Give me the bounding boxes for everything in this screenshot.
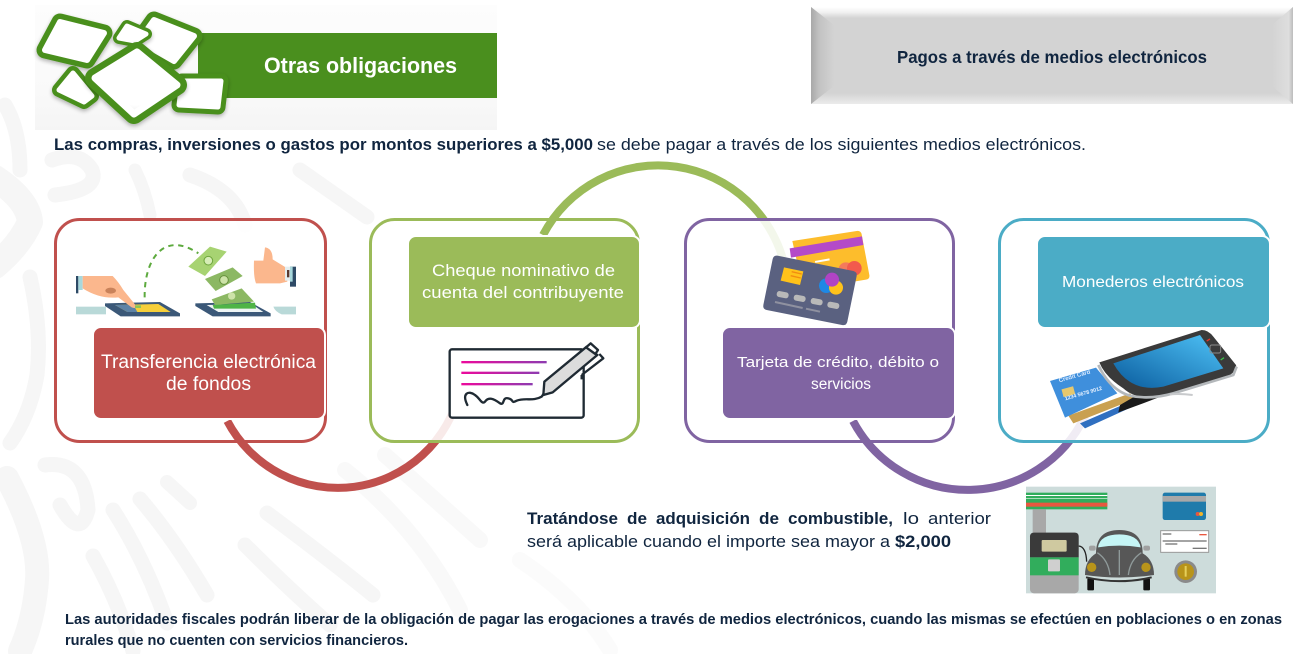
combustible note: lo [903,510,919,528]
combustible note: Tratándose [527,510,618,528]
combustible note: anterior [928,510,992,528]
icon: phone wallet with cards: 1234 5678 9012 [1064,386,1103,402]
red card outline [56,220,326,442]
icon: money transfer between tablets [76,245,296,316]
purple connector arc [853,416,1085,490]
intro sentence: Las compras, inversiones o gastos por montos superiores a $5,000 [54,135,593,154]
combustible note: adquisición [656,510,750,528]
green label [408,236,640,328]
icon: credit cards [763,231,869,325]
section tag: Pagos a través de medios electrónicos: Pagos a través de medios electrónicos [897,47,1207,67]
footnote: rurales que no cuenten con servicios financieros. [65,633,408,649]
teal label: Monederos electrónicos [1062,274,1244,291]
footnote: Las autoridades fiscales podrán liberar de la obligación de pagar las erogaciones a través de medios electrónicos, cuando las mismas se efectúen en poblaciones o en zonas [65,612,1282,628]
green connector arc [543,165,786,270]
teal label [1037,236,1270,328]
panel: tarjeta de crédito [686,220,1085,490]
intro sentence [54,135,1086,154]
purple label: servicios [811,376,871,393]
combustible note: de [759,510,779,528]
green card outline [370,220,638,442]
purple label [722,327,955,419]
panel: monederos electrónicos [1000,220,1270,442]
green title bar [198,33,497,98]
icon: phone wallet with cards: Credit Card [1058,369,1092,384]
red label: Transferencia electrónica [101,352,316,373]
combustible note: de [627,510,647,528]
red label [93,327,325,419]
red connector arc [227,390,460,488]
panel: cheque nominativo [370,165,786,441]
purple label: Tarjeta de crédito, débito o [737,354,939,371]
icon: signed cheque with pen [450,343,603,418]
decorative rounded tiles [45,20,221,114]
green label: Cheque nominativo de [432,261,615,280]
teal card outline [1000,220,1268,442]
purple card outline [686,220,954,442]
icon: phone wallet with cards [1050,330,1237,428]
header banner: Otras obligaciones [35,5,497,130]
title text: Otras obligaciones [264,53,457,78]
combustible note: combustible, [788,510,893,528]
combustible note [527,510,992,551]
icon: gas pump, car and payment methods [1026,487,1216,593]
panel: transferencia electrónica [56,220,460,488]
footnote [65,612,1282,649]
red label: de fondos [166,374,251,395]
section tag: Pagos a través de medios electrónicos [811,7,1293,104]
combustible note: será aplicable cuando el importe sea mayor a [527,533,891,551]
green label: cuenta del contribuyente [422,283,624,302]
combustible note: $2,000 [895,533,951,551]
intro sentence: se debe pagar a través de los siguientes medios electrónicos. [597,135,1086,154]
